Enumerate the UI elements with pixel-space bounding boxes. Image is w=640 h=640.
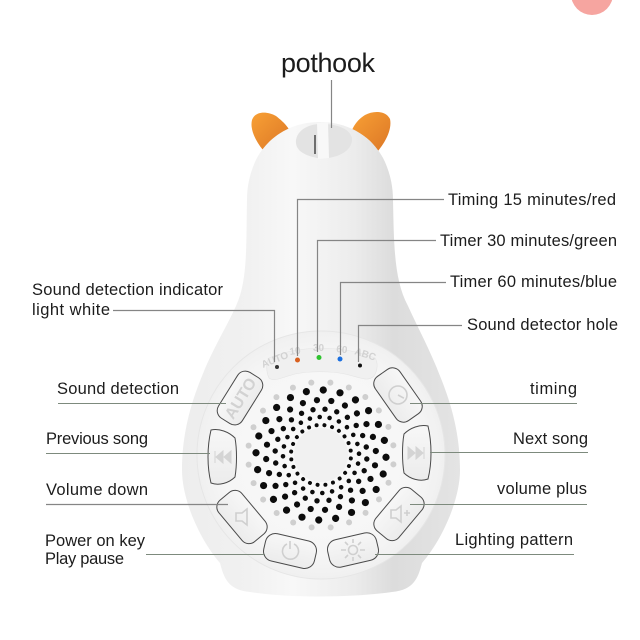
label: volume plus: volume plus: [497, 480, 587, 498]
device body: [182, 122, 460, 596]
icon: left orange ear: [251, 113, 290, 150]
pothook slot on the head: [296, 122, 352, 159]
label: timer 60 minutes: Timer 60 minutes/blue: [450, 273, 617, 291]
button: power: [262, 532, 318, 570]
button: volume down: [213, 487, 271, 547]
label: sound detection indicator: [32, 281, 224, 319]
icon: right orange ear: [352, 112, 390, 151]
indicator labels: 30: [313, 343, 325, 354]
button: lighting pattern: [325, 531, 381, 569]
speaker grille: [245, 379, 397, 531]
label: volume down: Volume down: [46, 481, 148, 499]
button: AUTO: [214, 368, 266, 428]
indicator plate: [267, 348, 377, 380]
label: sound detection: Sound detection: [57, 380, 179, 398]
label: power on key and play pause: Power on key: [45, 532, 146, 550]
product: white pear-shaped device: [182, 112, 460, 596]
label: next song: Next song: [513, 430, 588, 448]
label: power on key and play pause: [45, 532, 146, 568]
label: power on key and play pause: Play pause: [45, 550, 124, 568]
faint front face ring: [197, 331, 445, 579]
indicator labels: ABC: [353, 346, 377, 364]
label: timer 30 minutes: Timer 30 minutes/green: [440, 232, 617, 250]
label: timing 15 minutes: Timing 15 minutes/red: [448, 191, 616, 209]
decorative pink circle top right: [571, 0, 613, 15]
button: AUTO: AUTO: [222, 375, 260, 422]
label: lighting pattern: Lighting pattern: [455, 531, 573, 549]
label: sound detection indicator: Sound detection indicator: [32, 281, 224, 299]
label: sound detector hole: Sound detector hole: [467, 316, 618, 334]
label: sound detection indicator: light white: [32, 301, 110, 319]
indicator labels: 10: [289, 345, 302, 358]
button: previous song: [208, 429, 236, 484]
indicator labels: 60: [336, 344, 348, 356]
button: timing: [370, 364, 426, 426]
label: timing: timing: [530, 380, 577, 398]
label: pothook: pothook: [281, 48, 376, 78]
button: volume plus: [370, 484, 428, 544]
indicator lights: [275, 355, 362, 369]
callout lines: [46, 80, 588, 554]
indicator labels: AUTO: [260, 350, 290, 371]
button: next song: [402, 425, 431, 480]
label: previous song: Previous song: [46, 430, 148, 448]
indicator labels: [260, 343, 377, 371]
